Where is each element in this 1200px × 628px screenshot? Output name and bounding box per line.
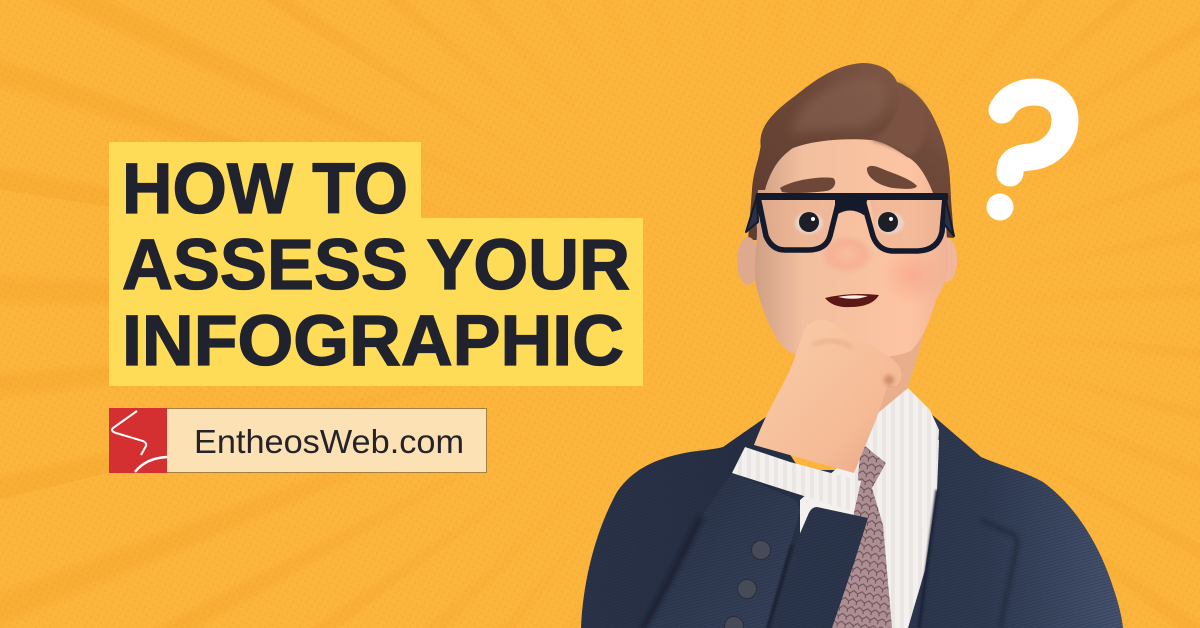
- right lapel and pocket: [919, 490, 1017, 628]
- hair: [752, 63, 950, 195]
- eyebrows: [780, 166, 917, 193]
- title text: HOW TO: [122, 150, 408, 229]
- eye left: [795, 212, 823, 234]
- left ear: [737, 237, 759, 285]
- hair back: [748, 110, 954, 240]
- sleeve buttons: [724, 540, 770, 628]
- title text: INFOGRAPHIC: [122, 302, 624, 381]
- mouth: [825, 294, 879, 307]
- necktie: [832, 443, 892, 628]
- raised forearm and hand: [754, 320, 901, 473]
- title text: ASSESS YOUR: [122, 226, 630, 305]
- lens tint: [762, 199, 942, 248]
- cheek blush: [882, 245, 942, 305]
- suit sleeve: [643, 473, 868, 628]
- question mark icon: [986, 92, 1065, 220]
- logo: EntheosWeb.com: [109, 408, 486, 473]
- logo text: EntheosWeb.com: [194, 423, 464, 460]
- character: thinking man: [581, 63, 1123, 628]
- title highlight background: [109, 142, 643, 386]
- glasses: [746, 194, 954, 251]
- background sunburst rays: [6, 11, 212, 620]
- shirt: [800, 440, 939, 628]
- neck: [850, 330, 925, 430]
- title text: [122, 150, 630, 381]
- logo red mark: [109, 408, 167, 473]
- eye right: [876, 212, 904, 234]
- face: [755, 132, 948, 359]
- suit jacket: [581, 413, 1123, 628]
- nose: [820, 238, 874, 278]
- shirt cuff: [732, 447, 861, 512]
- head: [737, 63, 957, 359]
- shirt collar: [861, 388, 939, 480]
- right ear: [937, 238, 957, 282]
- title block: [109, 142, 643, 386]
